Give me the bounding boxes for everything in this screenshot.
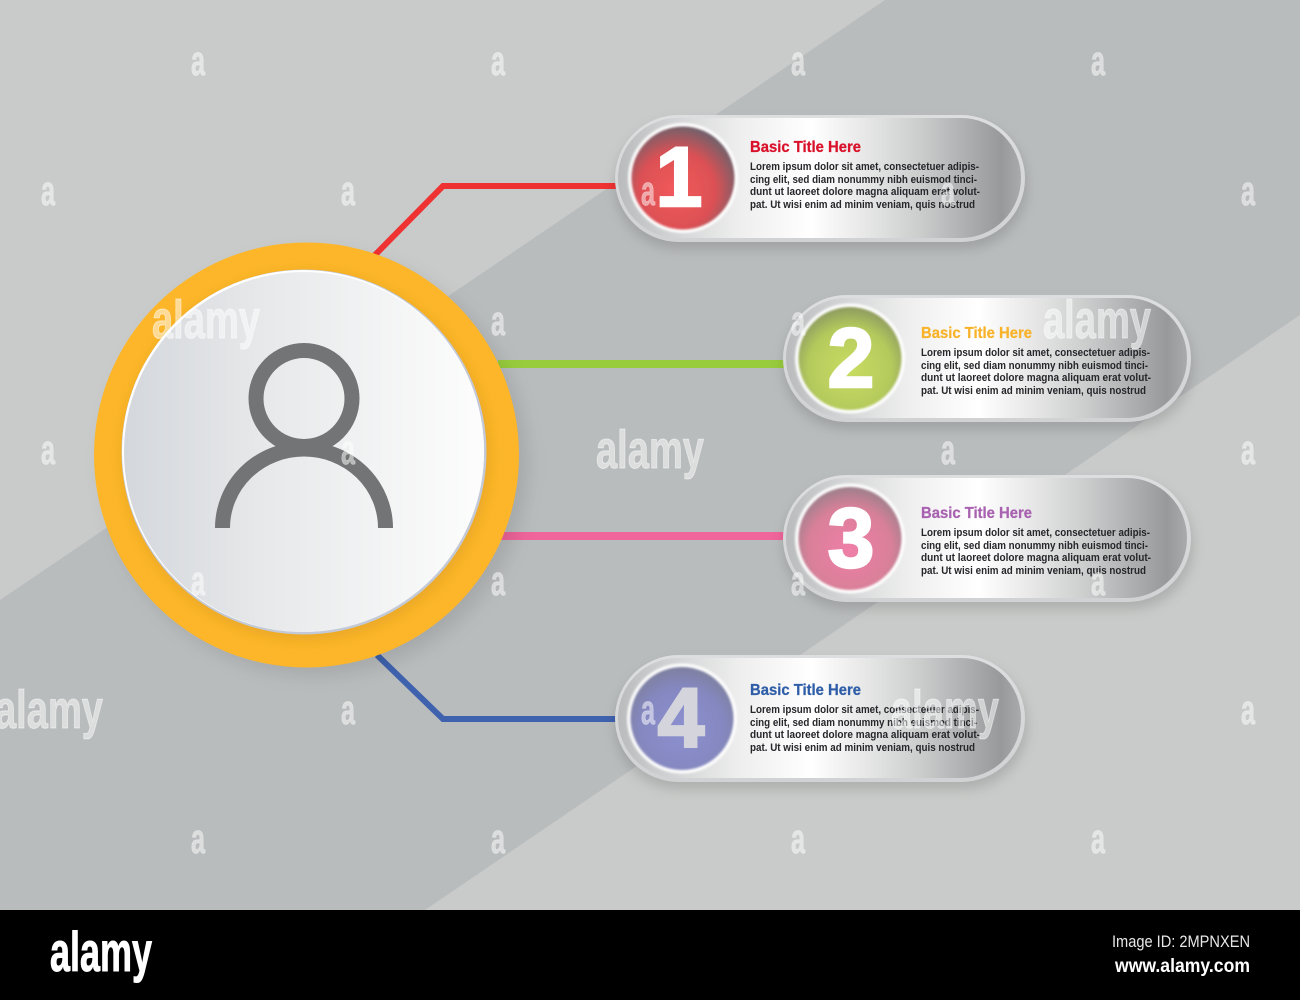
watermarks: a xyxy=(791,557,805,604)
icon: person xyxy=(222,350,386,528)
heading: step 2: Basic Title Here xyxy=(921,325,1032,342)
panel: step 1 xyxy=(615,115,1027,249)
text block: step 4: pat. Ut wisi enim ad minim veniam, quis nostrud xyxy=(750,742,975,754)
text block: step 1: pat. Ut wisi enim ad minim veniam, quis nostrud xyxy=(750,199,975,211)
connector: pink line to step 3 xyxy=(500,532,786,540)
watermarks: a xyxy=(1091,815,1105,862)
number badge 1 xyxy=(628,123,738,233)
text block: step 4 xyxy=(750,704,980,754)
text block: step 1: Lorem ipsum dolor sit amet, consectetuer adipis- xyxy=(750,161,979,173)
text block: step 4: dunt ut laoreet dolore magna aliquam erat volut- xyxy=(750,729,980,741)
watermarks xyxy=(0,37,1255,862)
watermarks: a xyxy=(341,426,355,473)
text block: step 2: cing elit, sed diam nonummy nibh euismod tinci- xyxy=(921,360,1148,372)
watermarks: a xyxy=(791,37,805,84)
watermarks: a xyxy=(341,686,355,733)
watermarks: a xyxy=(491,557,505,604)
text block: step 3 xyxy=(921,527,1151,577)
text block: step 2: Lorem ipsum dolor sit amet, consectetuer adipis- xyxy=(921,347,1150,359)
panel: step 4 xyxy=(615,655,1027,789)
watermarks: a xyxy=(641,167,655,214)
text block: step 4: cing elit, sed diam nonummy nibh euismod tinci- xyxy=(750,717,977,729)
watermarks: alamy xyxy=(596,420,704,480)
panel: step 3 xyxy=(783,475,1193,609)
connector: green line to step 2 xyxy=(498,360,786,368)
number badge 3 xyxy=(795,484,905,594)
watermarks: a xyxy=(791,297,805,344)
text block: step 2: pat. Ut wisi enim ad minim veniam, quis nostrud xyxy=(921,385,1146,397)
watermarks: a xyxy=(491,37,505,84)
watermarks: a xyxy=(791,815,805,862)
text block: step 1: dunt ut laoreet dolore magna aliquam erat volut- xyxy=(750,186,980,198)
text block: step 1 xyxy=(750,161,980,211)
watermarks: a xyxy=(941,167,955,214)
text block: step 3: Lorem ipsum dolor sit amet, consectetuer adipis- xyxy=(921,527,1150,539)
connector: blue line to step 4 xyxy=(377,655,620,719)
text block: step 3: pat. Ut wisi enim ad minim veniam, quis nostrud xyxy=(921,565,1146,577)
watermarks: a xyxy=(1091,557,1105,604)
heading: step 3: Basic Title Here xyxy=(921,505,1032,522)
number badge 1: 1 xyxy=(656,130,702,224)
number badge 3: 3 xyxy=(828,491,874,585)
watermarks: a xyxy=(941,426,955,473)
text block: step 3: cing elit, sed diam nonummy nibh euismod tinci- xyxy=(921,540,1148,552)
connector: red line to step 1 xyxy=(375,186,620,255)
watermarks: a xyxy=(1241,167,1255,214)
website: www.alamy.com xyxy=(1114,956,1250,977)
watermarks: a xyxy=(191,37,205,84)
watermarks: a xyxy=(191,815,205,862)
number badge 2 xyxy=(795,304,905,414)
text block: step 4: Lorem ipsum dolor sit amet, consectetuer adipis- xyxy=(750,704,979,716)
watermarks: a xyxy=(1091,37,1105,84)
watermarks: a xyxy=(641,686,655,733)
watermarks: a xyxy=(191,557,205,604)
heading: step 4: Basic Title Here xyxy=(750,682,861,699)
watermarks: a xyxy=(491,297,505,344)
watermarks: a xyxy=(41,167,55,214)
text block: step 2 xyxy=(921,347,1151,397)
watermarks: a xyxy=(491,815,505,862)
watermarks: a xyxy=(1241,426,1255,473)
number badge 2: 2 xyxy=(828,311,874,405)
watermarks: a xyxy=(1241,686,1255,733)
text block: step 3: dunt ut laoreet dolore magna aliquam erat volut- xyxy=(921,552,1151,564)
image id: Image ID: 2MPNXEN xyxy=(1112,932,1250,951)
watermarks: alamy xyxy=(891,680,999,740)
text block: step 2: dunt ut laoreet dolore magna aliquam erat volut- xyxy=(921,372,1151,384)
number badge 4 xyxy=(627,664,737,774)
panel: step 2 xyxy=(783,295,1193,429)
number badge 4: 4 xyxy=(658,671,705,765)
watermarks: a xyxy=(341,167,355,214)
footer bar xyxy=(0,910,1300,1000)
watermarks: alamy xyxy=(152,290,260,350)
central person badge xyxy=(94,242,528,676)
text block: step 1: cing elit, sed diam nonummy nibh euismod tinci- xyxy=(750,174,977,186)
footer logo: alamy xyxy=(50,920,152,983)
heading: step 1: Basic Title Here xyxy=(750,139,861,156)
watermarks: a xyxy=(41,426,55,473)
watermarks: alamy xyxy=(1043,290,1151,350)
